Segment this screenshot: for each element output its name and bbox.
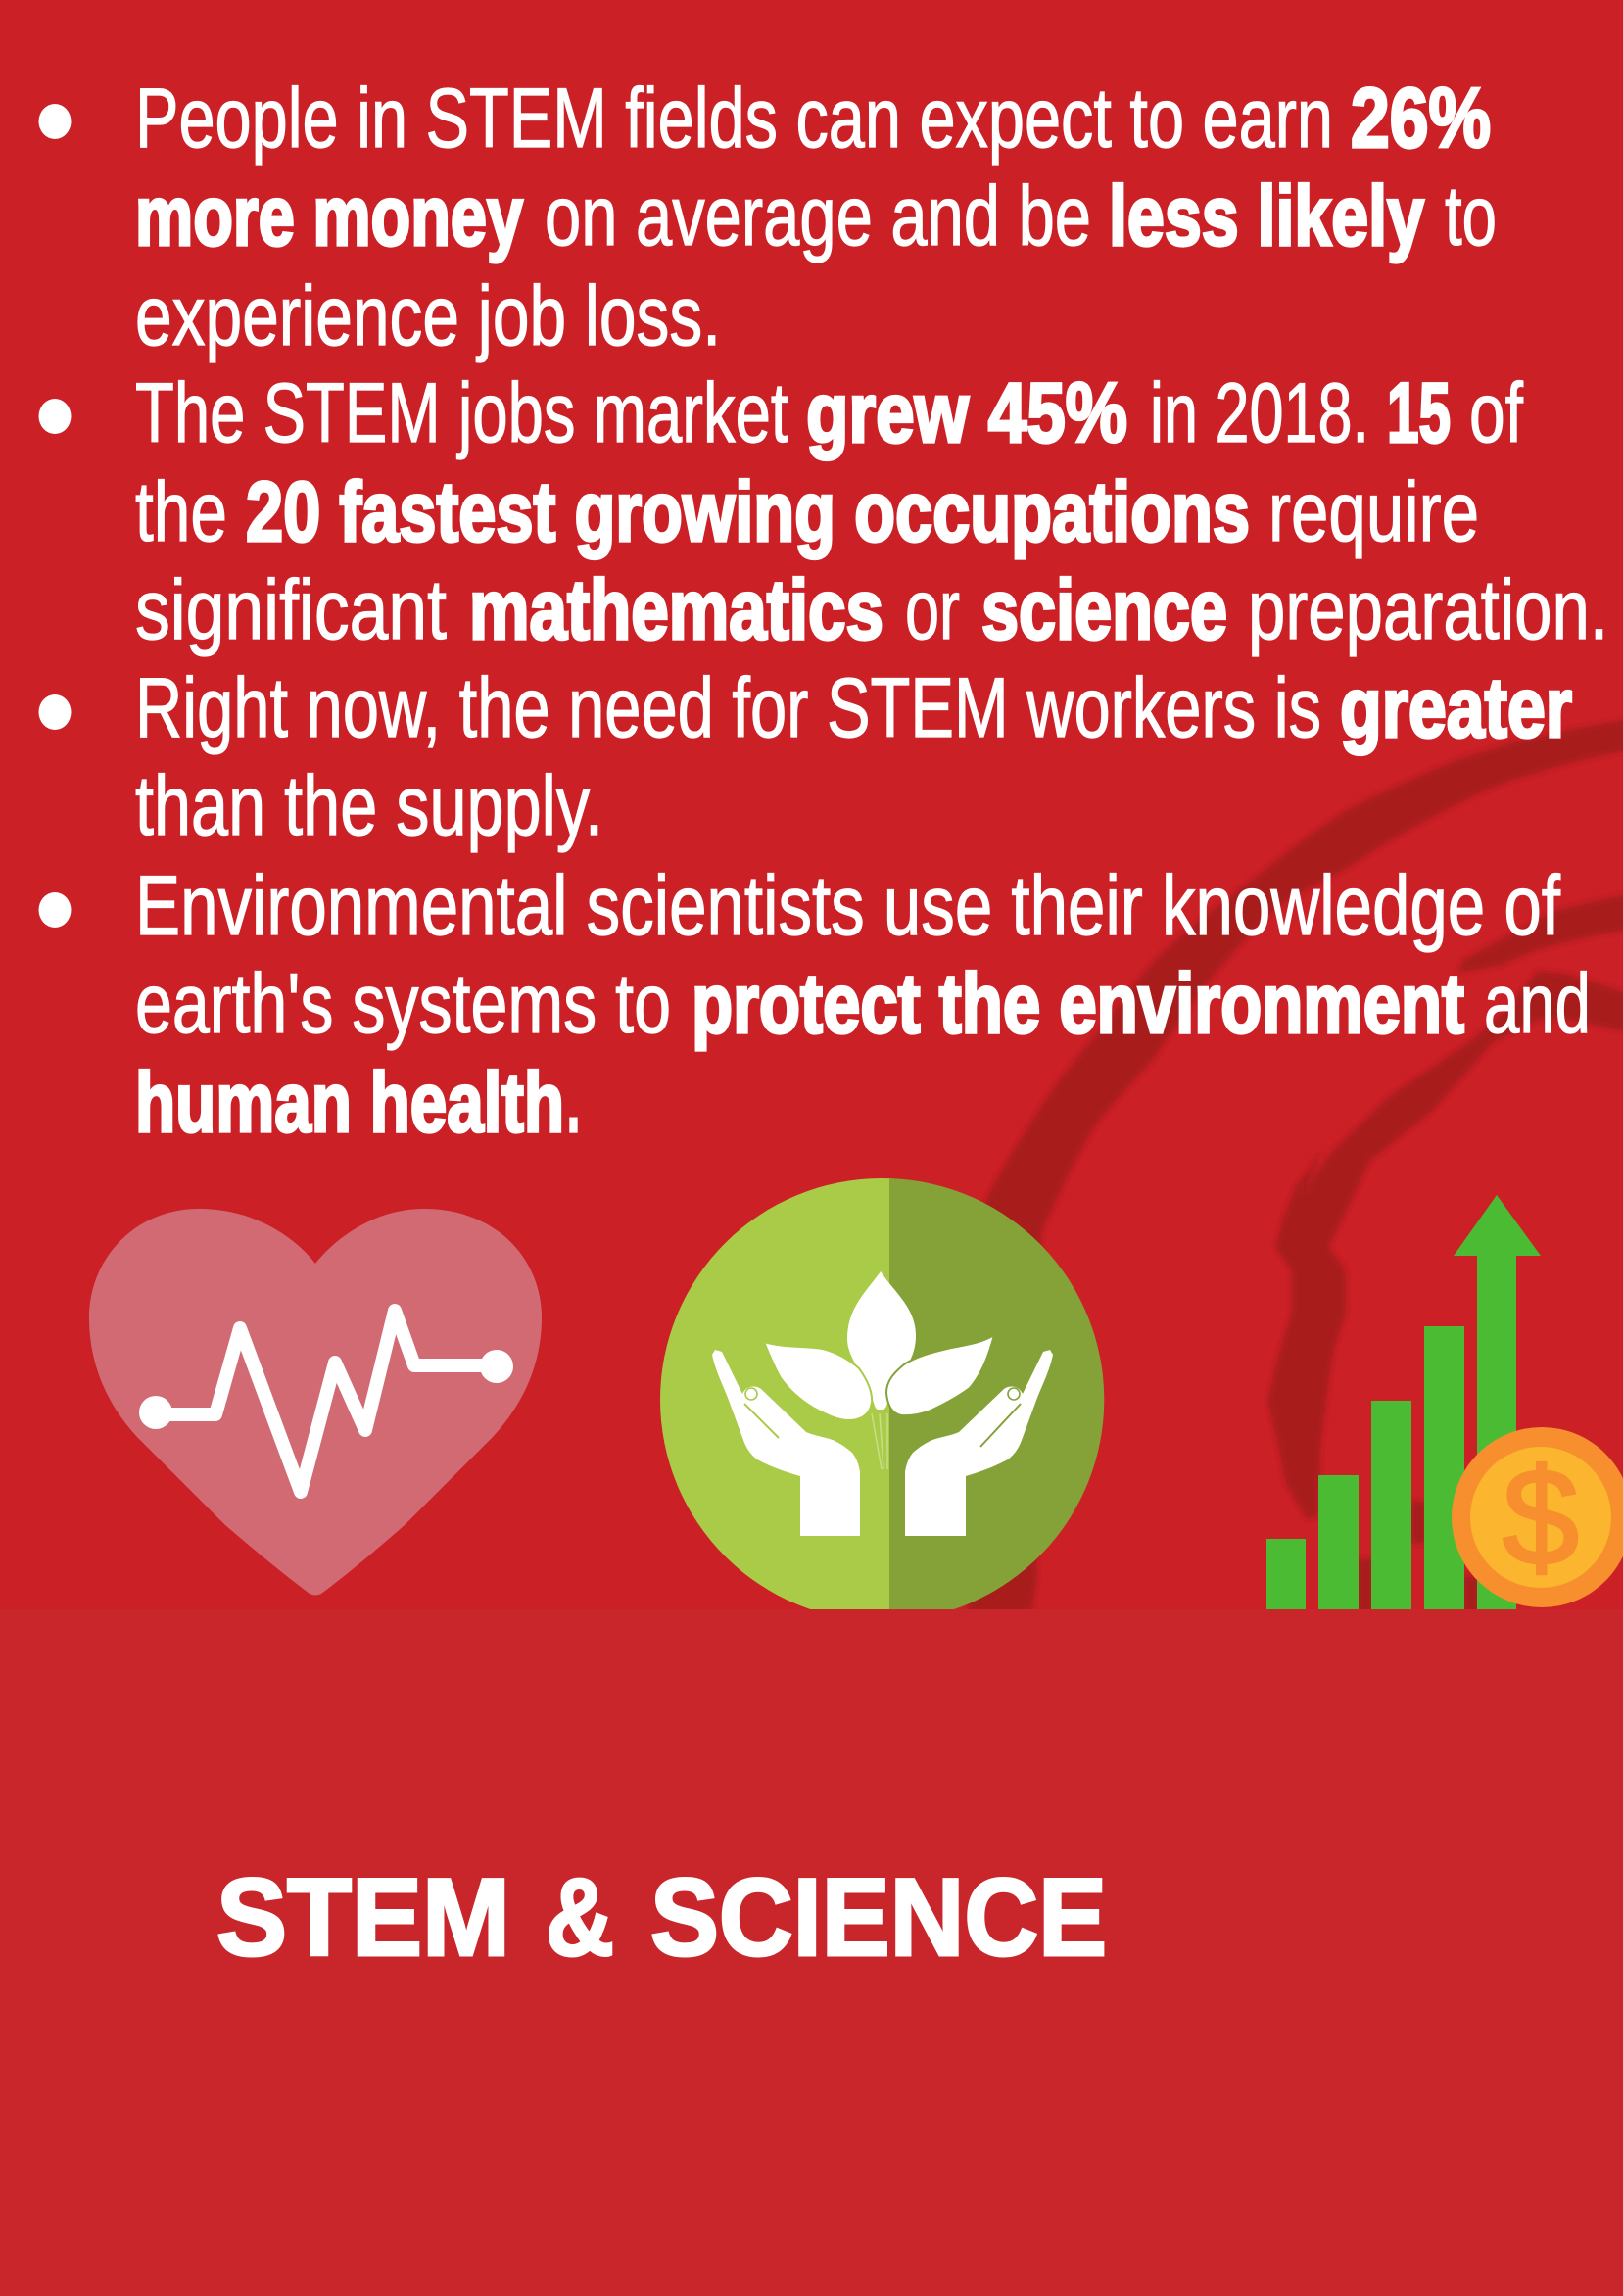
icon: rising bar chart with arrow and coin <box>1266 1195 1623 1609</box>
bullet 2: job market growth: mathematics <box>469 563 883 657</box>
title: & <box>546 1856 614 1979</box>
plant stem lines <box>872 1413 887 1469</box>
right leaf <box>886 1335 994 1415</box>
left hand <box>712 1350 860 1536</box>
bullet 2: job market growth: the <box>135 465 227 559</box>
title: STEM <box>216 1856 510 1979</box>
background: lower red panel <box>0 1609 1623 2296</box>
icon: heart with pulse line <box>89 1209 542 1595</box>
bullet 1: earnings: more money <box>135 169 523 263</box>
title <box>216 1856 1107 1979</box>
bullet 4: environmental scientists: human health <box>135 1056 564 1150</box>
bullet 1: earnings: less likely <box>1109 169 1424 263</box>
bullet 1: earnings: 26% <box>1351 72 1491 166</box>
bullet 2: job market growth: 15 <box>1387 366 1451 460</box>
bar chart bars and arrow <box>1266 1195 1541 1609</box>
bullet 2: job market growth: require <box>1268 465 1479 559</box>
bullet 4: environmental scientists: and <box>1484 957 1591 1051</box>
bullet 4: environmental scientists <box>39 859 1591 1150</box>
bullet 3: worker demand: greater <box>1340 661 1572 755</box>
bullet 2: job market growth: 20 fastest growing occupations <box>246 465 1250 559</box>
bullet 2: job market growth <box>39 366 1608 657</box>
bullet 4: environmental scientists: . <box>567 1056 580 1150</box>
bullet 1: earnings: to <box>1445 169 1497 263</box>
bullet 1: earnings: on average and be <box>545 169 1091 263</box>
bullet 2: job market growth: grew 45% <box>806 366 1127 460</box>
icon: dollar coin <box>1452 1427 1623 1607</box>
title: SCIENCE <box>650 1856 1107 1979</box>
bullet 3: worker demand <box>39 661 1572 853</box>
left leaf <box>764 1342 872 1420</box>
bullet 2: job market growth: significant <box>135 563 447 657</box>
bullet 2: job market growth: The STEM jobs market <box>135 366 788 460</box>
bullet 1: earnings: experience job loss. <box>135 269 721 363</box>
bullet 3: worker demand: Right now, the need for STEM workers is <box>135 661 1321 755</box>
bullet 2: job market growth: of <box>1469 366 1524 460</box>
bullet 2: job market growth: science <box>981 563 1227 657</box>
bullet 4: environmental scientists: earth's systems to <box>135 957 671 1051</box>
centre leaf <box>847 1271 916 1410</box>
icon: dollar coin: $ <box>1503 1440 1579 1594</box>
background: dark red curved strokes <box>955 719 1623 1626</box>
bullet 2: job market growth: in 2018. <box>1150 366 1369 460</box>
right hand <box>905 1350 1053 1536</box>
bullet 2: job market growth: or <box>905 563 960 657</box>
bullet 3: worker demand: than the supply. <box>135 759 603 853</box>
background: upper red panel <box>0 0 1623 1609</box>
icon: green circle with hands holding a plant <box>660 1178 1104 1621</box>
bullet 1: earnings <box>39 72 1497 363</box>
